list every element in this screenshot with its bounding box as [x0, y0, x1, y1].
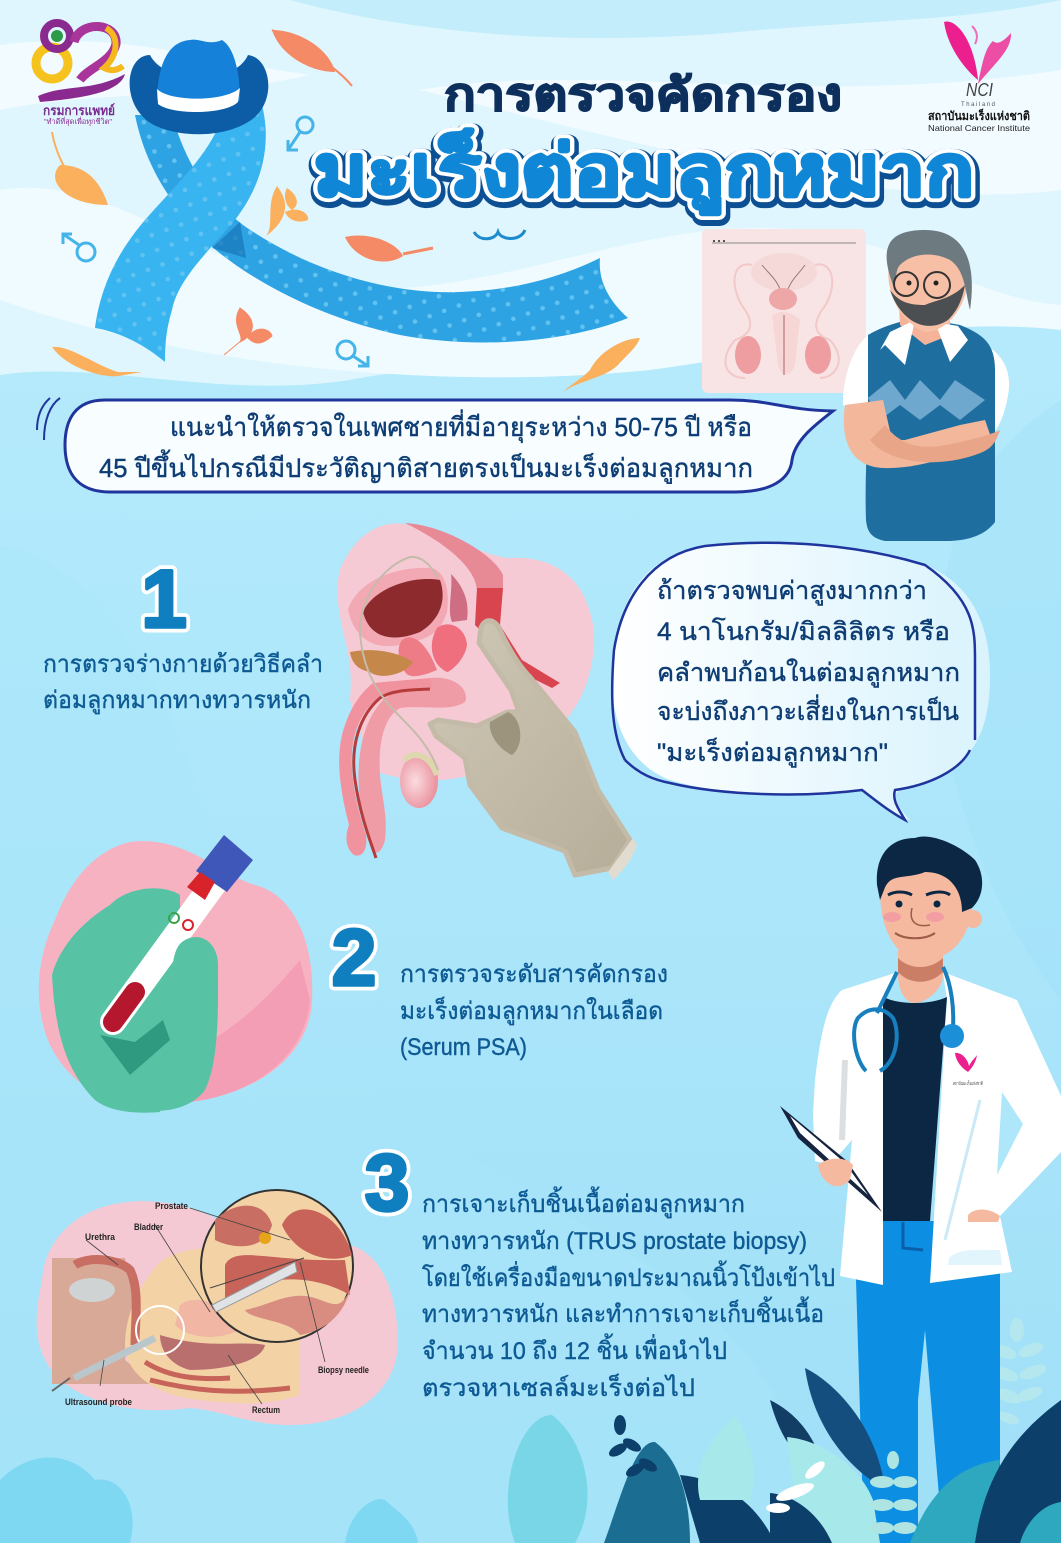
icon: blue hat	[130, 40, 268, 134]
face	[880, 872, 972, 960]
character: doctor	[780, 837, 1061, 1543]
shirt	[883, 997, 947, 1221]
warning text: ถ้าตรวจพบค่าสูงมากกว่า	[657, 577, 927, 606]
illustration: digital rectal exam	[338, 523, 637, 880]
step 2 number: 2	[332, 913, 376, 1002]
lab coat	[813, 972, 898, 1285]
decorative leaves and gender symbols	[52, 30, 640, 392]
hair	[877, 837, 982, 912]
blue ribbon	[95, 105, 628, 362]
coat logo	[955, 1053, 977, 1072]
logo: National Cancer Institute: Thailand	[961, 102, 995, 108]
warning text	[657, 577, 960, 768]
title: การตรวจคัดกรอง	[444, 69, 842, 120]
step 1 text: การตรวจร่างกายด้วยวิธีคลำ	[43, 651, 323, 678]
diagram labels: Bladder	[134, 1222, 163, 1233]
neck	[898, 950, 943, 1003]
poster with anatomy diagram	[702, 229, 866, 393]
step 2 text: การตรวจระดับสารคัดกรอง	[400, 961, 668, 988]
stethoscope	[877, 967, 953, 1027]
step 3 number: 3	[365, 1138, 409, 1227]
clipboard and hand	[780, 1106, 882, 1212]
step 3 text: ทางทวารหนัก (TRUS prostate biopsy)	[422, 1228, 807, 1255]
recommendation text	[99, 409, 753, 484]
title: มะเร็งต่อมลูกหมาก	[314, 128, 974, 215]
warning text: คลำพบก้อนในต่อมลูกหมาก	[657, 658, 960, 688]
step 1 text: ต่อมลูกหมากทางทวารหนัก	[43, 687, 311, 715]
foreground plants	[508, 1368, 1061, 1543]
step 2 text: มะเร็งต่อมลูกหมากในเลือด	[400, 996, 663, 1026]
step 3 text: การเจาะเก็บชิ้นเนื้อต่อมลูกหมาก	[422, 1186, 745, 1219]
logo: National Cancer Institute	[928, 22, 1030, 133]
character: older man	[843, 230, 1009, 541]
step 3 text	[422, 1186, 835, 1402]
diagram labels: Ultrasound probe	[65, 1397, 132, 1408]
trousers	[856, 1221, 1000, 1543]
diagram labels: Urethra	[85, 1232, 116, 1243]
step 1 number: 1	[141, 554, 187, 645]
recommendation text: แนะนำให้ตรวจในเพศชายที่มีอายุระหว่าง 50-75 ปี หรือ	[170, 409, 752, 443]
step 2 text	[400, 961, 668, 1061]
logo: Department of Medical Services 82: กรมการแพทย์	[43, 103, 115, 118]
logo: National Cancer Institute: NCI	[966, 80, 993, 100]
illustration: TRUS biopsy diagram	[37, 1190, 398, 1425]
diagram labels: Prostate	[155, 1201, 188, 1212]
character: doctor: สถาบันมะเร็งแห่งชาติ	[953, 1079, 983, 1087]
step 3 text: ทางทวารหนัก และทำการเจาะเก็บชิ้นเนื้อ	[422, 1296, 824, 1328]
diagram labels: Biopsy needle	[318, 1365, 369, 1376]
logo: Department of Medical Services 82	[36, 23, 125, 126]
step 2 number: 2	[332, 913, 376, 1002]
diagram labels: Rectum	[252, 1405, 280, 1416]
diagram labels	[65, 1201, 369, 1416]
illustration: gloved hand holding blood tube	[39, 835, 312, 1113]
logo: National Cancer Institute: National Cancer Institute	[928, 123, 1030, 133]
warning text: 4 นาโนกรัม/มิลลิลิตร หรือ	[657, 617, 950, 646]
step 3 text: ตรวจหาเซลล์มะเร็งต่อไป	[422, 1373, 695, 1402]
step 1 text	[43, 651, 323, 715]
step 1 number: 1	[141, 554, 187, 645]
step 2 text: (Serum PSA)	[400, 1034, 527, 1061]
title: มะเร็งต่อมลูกหมาก	[315, 131, 975, 218]
decorative fern behind doctor	[990, 1318, 1048, 1427]
recommendation text: 45 ปีขึ้นไปกรณีมีประวัติญาติสายตรงเป็นมะเร็งต่อมลูกหมาก	[99, 449, 753, 484]
warning text: จะบ่งถึงภาวะเสี่ยงในการเป็น	[657, 694, 959, 726]
step 3 text: โดยใช้เครื่องมือขนาดประมาณนิ้วโป้งเข้าไป	[422, 1260, 835, 1292]
logo: Department of Medical Services 82: "ทำดีที่สุดเพื่อทุกชีวิต"	[44, 116, 112, 126]
step 3 text: จำนวน 10 ถึง 12 ชิ้น เพื่อนำไป	[422, 1333, 727, 1365]
step 3 number: 3	[365, 1138, 409, 1227]
warning text: "มะเร็งต่อมลูกหมาก"	[657, 737, 888, 768]
title: มะเร็งต่อมลูกหมาก	[314, 128, 974, 215]
speech bubble: recommendation	[37, 398, 833, 492]
logo: National Cancer Institute: สถาบันมะเร็งแห่งชาติ	[928, 108, 1030, 123]
speech bubble: warning	[612, 543, 990, 820]
title	[314, 69, 975, 218]
